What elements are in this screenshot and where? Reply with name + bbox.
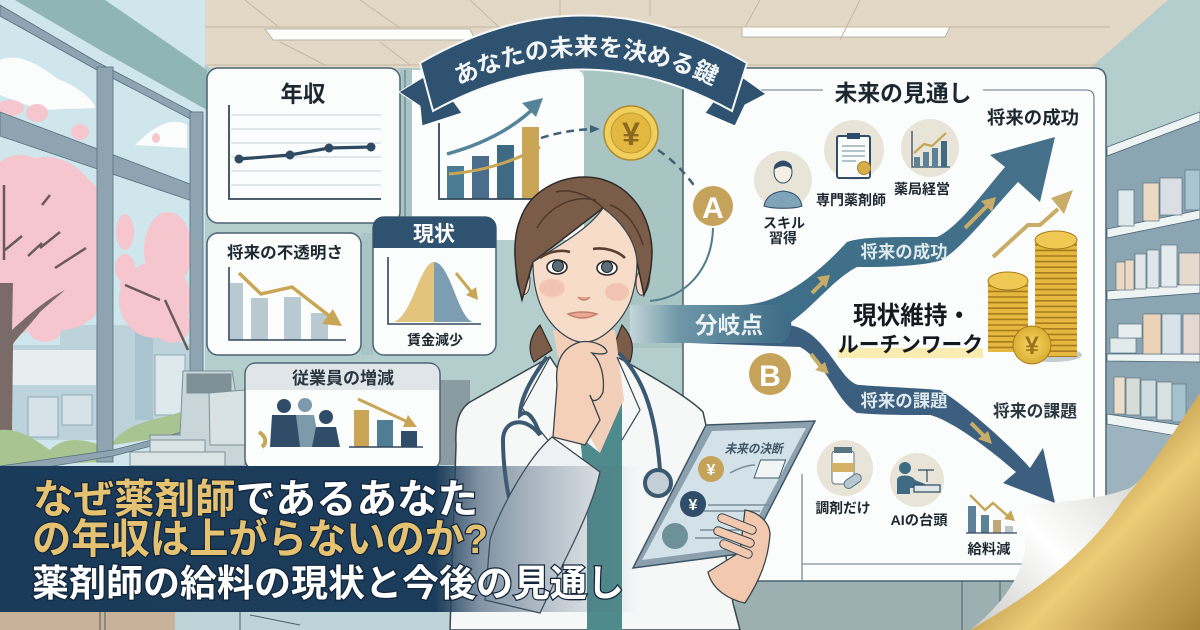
ponytail [530, 325, 632, 362]
left sleeve [485, 437, 600, 613]
label: skill acquisition: 習得 [769, 230, 797, 246]
ribbon title: あなたの未来を決める鍵 [454, 34, 720, 86]
panel: growth chart behind ribbon [412, 70, 584, 240]
curl flap [970, 393, 1200, 630]
ribbon tails [399, 72, 766, 126]
nose and mouth [568, 297, 597, 318]
page curl corner [970, 393, 1200, 630]
label: skill acquisition [763, 215, 805, 246]
label: 将来の課題 [860, 391, 948, 411]
label: future challenges right: 将来の課題 [993, 402, 1077, 421]
ears [516, 268, 650, 295]
hair back [515, 177, 652, 300]
icon: AI machine [890, 453, 944, 507]
icon: clipboard certificate [824, 120, 884, 180]
coat lapels [522, 357, 640, 465]
heading: 従業員の増減 [292, 368, 394, 388]
icon: yen coin [604, 106, 658, 160]
icon: stacked yen coins [988, 231, 1082, 364]
stethoscope [503, 353, 671, 502]
scrubs [580, 403, 622, 630]
connector line from woman to option A [650, 228, 713, 301]
rising arrow [447, 98, 543, 174]
highlighted text: keep status quo: ルーチンワーク [838, 333, 983, 357]
title line 2: の年収は上がらないのか? [32, 516, 488, 562]
face [533, 208, 637, 342]
label: rise of AI: AIの台頭 [890, 512, 948, 528]
panel: current state [373, 217, 496, 355]
eyes and brows [540, 248, 625, 275]
badge: option A: A [702, 192, 724, 225]
window with cherry blossoms [0, 0, 207, 470]
heading: future outlook: 未来の見通し [834, 80, 972, 106]
tree blossoms [0, 100, 192, 343]
badge: option B: B [759, 360, 781, 393]
right wall shelves [1107, 112, 1200, 630]
tablet: ¥ [689, 497, 698, 514]
title line 1: なぜ薬剤師であるあなた [33, 476, 478, 522]
icon: medicine bottle [817, 440, 873, 496]
ceiling [118, 0, 1168, 68]
white coat [450, 357, 740, 630]
highlighted text: keep status quo [838, 302, 983, 358]
title band [0, 466, 640, 612]
woman pharmacist [450, 177, 815, 630]
falling bar chart [229, 267, 346, 340]
heading: 年収 [280, 82, 326, 107]
ribbon banner [399, 14, 765, 126]
label: specialist pharmacist: 専門薬剤師 [816, 192, 886, 208]
gold underside [970, 393, 1200, 630]
frames [0, 5, 203, 470]
floor [0, 581, 1035, 630]
line chart [229, 105, 381, 199]
icon: staff group [259, 398, 340, 447]
highlighted text: keep status quo: 現状維持・ [853, 302, 971, 330]
icon: skill person [754, 151, 812, 209]
neck [553, 330, 624, 454]
title line 3: 薬剤師の給料の現状と今後の見通し [32, 563, 624, 604]
arrow: path to challenges [690, 325, 1055, 503]
icon: stacked yen coins: ¥ [1025, 332, 1039, 360]
ribbon arc [420, 16, 747, 111]
hair strands [537, 191, 643, 245]
fork point band [630, 305, 791, 343]
icon: yen coin: ¥ [622, 116, 640, 152]
hand holding tablet [708, 510, 770, 603]
panel: annual income [207, 68, 400, 223]
tablet: ¥ [707, 462, 716, 479]
badge: option A [693, 186, 733, 226]
bars [439, 123, 545, 199]
bell curve chart [388, 257, 481, 324]
falling bars [349, 399, 423, 447]
caption: 賃金減少 [407, 332, 463, 348]
label: pharmacy management: 薬局経営 [894, 181, 950, 197]
icon: pharmacy management chart [901, 119, 959, 177]
panel: big white future outlook panel [683, 68, 1106, 581]
label: skill acquisition: スキル [763, 215, 805, 231]
icon: gold rising arrow [993, 190, 1073, 257]
title text [32, 476, 624, 604]
label: dispensing only: 調剤だけ [816, 500, 870, 516]
arrow: path to success [690, 137, 1055, 323]
building behind window [0, 325, 190, 440]
panel: employee change [245, 363, 440, 470]
dashed arrow to coin [541, 125, 695, 187]
panel: uncertainty of the future [207, 233, 361, 355]
desk equipment [130, 371, 245, 466]
tablet title: 未来の決断 [724, 441, 786, 456]
badge: option B [749, 353, 791, 395]
thinking hand [553, 342, 607, 445]
heading: 将来の不透明さ [227, 244, 343, 262]
label: future success top: 将来の成功 [987, 107, 1079, 128]
fork point band: 分岐点 [695, 312, 763, 338]
label: salary decrease: 給料減 [968, 541, 1010, 557]
bushes [0, 412, 180, 466]
icon: falling salary bars [966, 495, 1017, 533]
tablet [633, 421, 815, 568]
heading: 現状 [413, 223, 455, 246]
label: 将来の成功 [860, 242, 948, 262]
blush [539, 279, 629, 301]
